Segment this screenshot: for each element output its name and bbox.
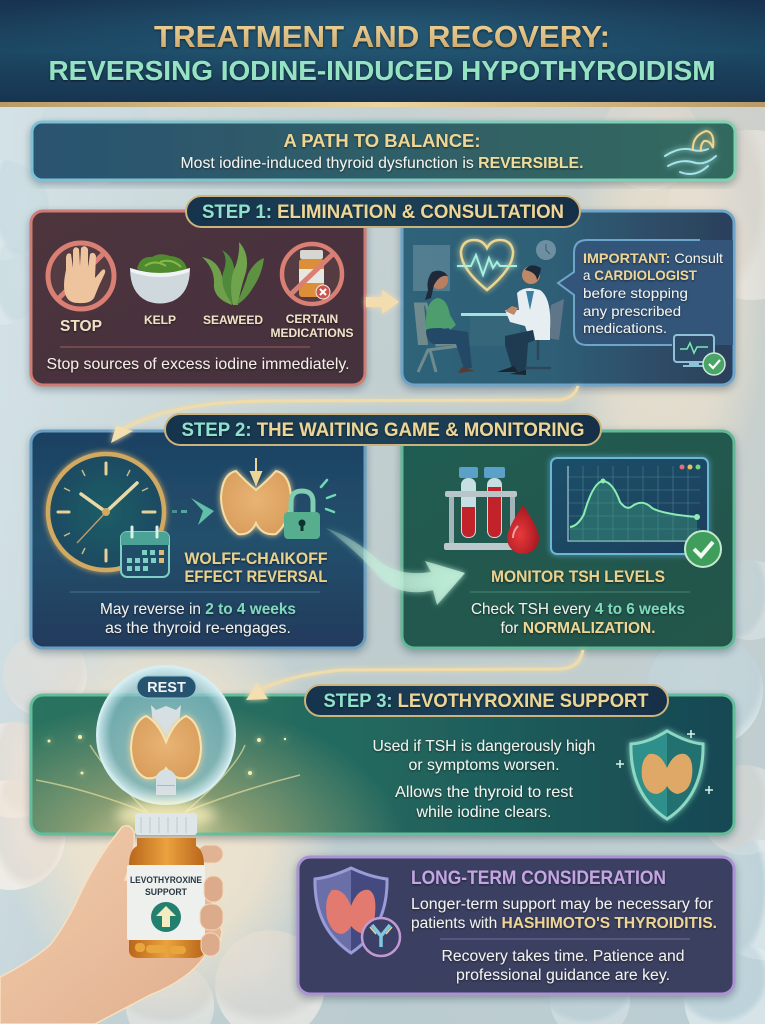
label: stop: STOP [60, 318, 102, 335]
text: used if TSH [372, 738, 596, 821]
callout text: a CARDIOLOGIST [583, 267, 697, 283]
heading: long-term consideration: LONG-TERM CONSIDERATION [411, 868, 666, 889]
label: certain medications: CERTAIN [286, 312, 338, 326]
heading pill: step 2 [165, 414, 601, 445]
heading pill: step 1: STEP 1: ELIMINATION & CONSULTATION [202, 202, 564, 223]
callout text: medications. [583, 320, 667, 336]
panel: step 3 levothyroxine [31, 695, 734, 834]
illustration: rest sphere with thyroid [97, 666, 235, 804]
light rays and sparkles [36, 745, 300, 815]
trachea [151, 705, 181, 795]
icon: kelp bowl [130, 254, 190, 304]
callout text: any prescribed [583, 303, 681, 319]
icon: crossed-out medication [282, 244, 342, 304]
icon: hand with wave [665, 131, 716, 174]
illustration: hand holding bottle [0, 801, 223, 1024]
panel: step 1 elimination [31, 211, 365, 385]
illustration: patient and doctor [413, 240, 564, 375]
icon: clock [48, 454, 164, 570]
callout bubble [558, 240, 733, 345]
icon: up arrow [151, 902, 181, 932]
banner: a path to balance [32, 122, 735, 180]
text: longer-term support [411, 896, 717, 932]
label: seaweed: SEAWEED [203, 313, 263, 327]
text: check TSH: for NORMALIZATION. [500, 620, 656, 637]
label: kelp: KELP [144, 313, 176, 327]
heading: wolff-chaikoff effect reversal: WOLFF-CHAIKOFF [184, 550, 328, 568]
bottle label text: LEVOTHYROXINE [130, 875, 202, 886]
text: check TSH: Check TSH every 4 to 6 weeks [471, 601, 685, 618]
label: certain medications: MEDICATIONS [270, 326, 354, 340]
icon: glowing heart with pulse [457, 240, 517, 290]
text: may reverse [100, 601, 296, 637]
doctor [530, 322, 560, 338]
pill bottle [127, 813, 205, 958]
text: used if TSH: or symptoms worsen. [408, 757, 560, 774]
heading: wolff-chaikoff effect reversal: EFFECT REVERSAL [184, 568, 328, 586]
text: recovery takes time: Recovery takes time. Patience and [442, 948, 684, 965]
panel: long-term consideration [298, 857, 734, 994]
header band [0, 0, 765, 107]
text: used if TSH: while iodine clears. [416, 804, 552, 821]
bottle label text: SUPPORT [145, 887, 187, 898]
text: stop sources: Stop sources of excess iodine immediately. [46, 356, 350, 373]
hand [0, 826, 222, 1024]
text: may reverse: May reverse in 2 to 4 weeks [100, 601, 296, 618]
text: may reverse: as the thyroid re-engages. [105, 620, 291, 637]
arrow: step 1 to consultation [366, 290, 399, 314]
title line 1: TREATMENT AND RECOVERY: [154, 19, 610, 54]
text: longer-term support: Longer-term support may be necessary for [411, 896, 713, 913]
text: used if TSH: Used if TSH is dangerously high [372, 738, 596, 755]
icon: check badge [685, 531, 721, 567]
arrow: dotted mint [172, 498, 214, 525]
callout text [583, 250, 723, 336]
top finger behind bottle [198, 845, 223, 863]
bottle label text [130, 875, 202, 898]
panel: step 2 monitoring [402, 431, 734, 648]
text: longer-term support: patients with HASHIMOTO'S THYROIDITIS. [411, 915, 717, 932]
text: recovery takes time [442, 948, 684, 984]
label: certain medications [270, 312, 354, 340]
title line 2: REVERSING IODINE-INDUCED HYPOTHYROIDISM [48, 55, 716, 86]
fingers [200, 876, 223, 956]
heading: monitor TSH levels: MONITOR TSH LEVELS [491, 568, 665, 586]
icon: stop hand [48, 243, 114, 309]
label: rest: REST [147, 680, 186, 696]
text: used if TSH: Allows the thyroid to rest [395, 784, 574, 801]
banner text: Most iodine-induced thyroid dysfunction is REVERSIBLE. [180, 155, 584, 172]
thyroid [131, 716, 201, 778]
patient [414, 304, 458, 372]
panel: step 2 waiting [31, 431, 365, 648]
callout text: before stopping [583, 285, 688, 301]
icon: test tubes [444, 467, 539, 554]
text: recovery takes time: professional guidance are key. [456, 967, 670, 984]
icon: seaweed [202, 242, 264, 305]
icon: monitor with check [674, 335, 725, 375]
text: check TSH [471, 601, 685, 637]
heading pill: step 3: STEP 3: LEVOTHYROXINE SUPPORT [324, 691, 649, 712]
heading pill: step 2: STEP 2: THE WAITING GAME & MONITORING [182, 420, 584, 441]
arrow: curve to step 3 [246, 650, 583, 700]
callout text: IMPORTANT: Consult [583, 250, 723, 266]
heading: wolff-chaikoff effect reversal [184, 550, 328, 586]
arrow: curve to step 2 [111, 386, 578, 443]
chart: TSH line [551, 458, 708, 554]
heading pill: step 1 [186, 196, 580, 227]
arrow: ribbon to monitoring [326, 528, 465, 605]
icon: thyroid with lock [221, 458, 335, 539]
banner heading: A PATH TO BALANCE: [284, 131, 480, 151]
icon: calendar [121, 527, 169, 577]
icon: teal shield with thyroid [616, 730, 713, 819]
icon: shield with thyroid and antibody [315, 868, 400, 956]
heading pill: step 3 [305, 685, 668, 716]
panel: step 1 consultation [402, 211, 734, 385]
